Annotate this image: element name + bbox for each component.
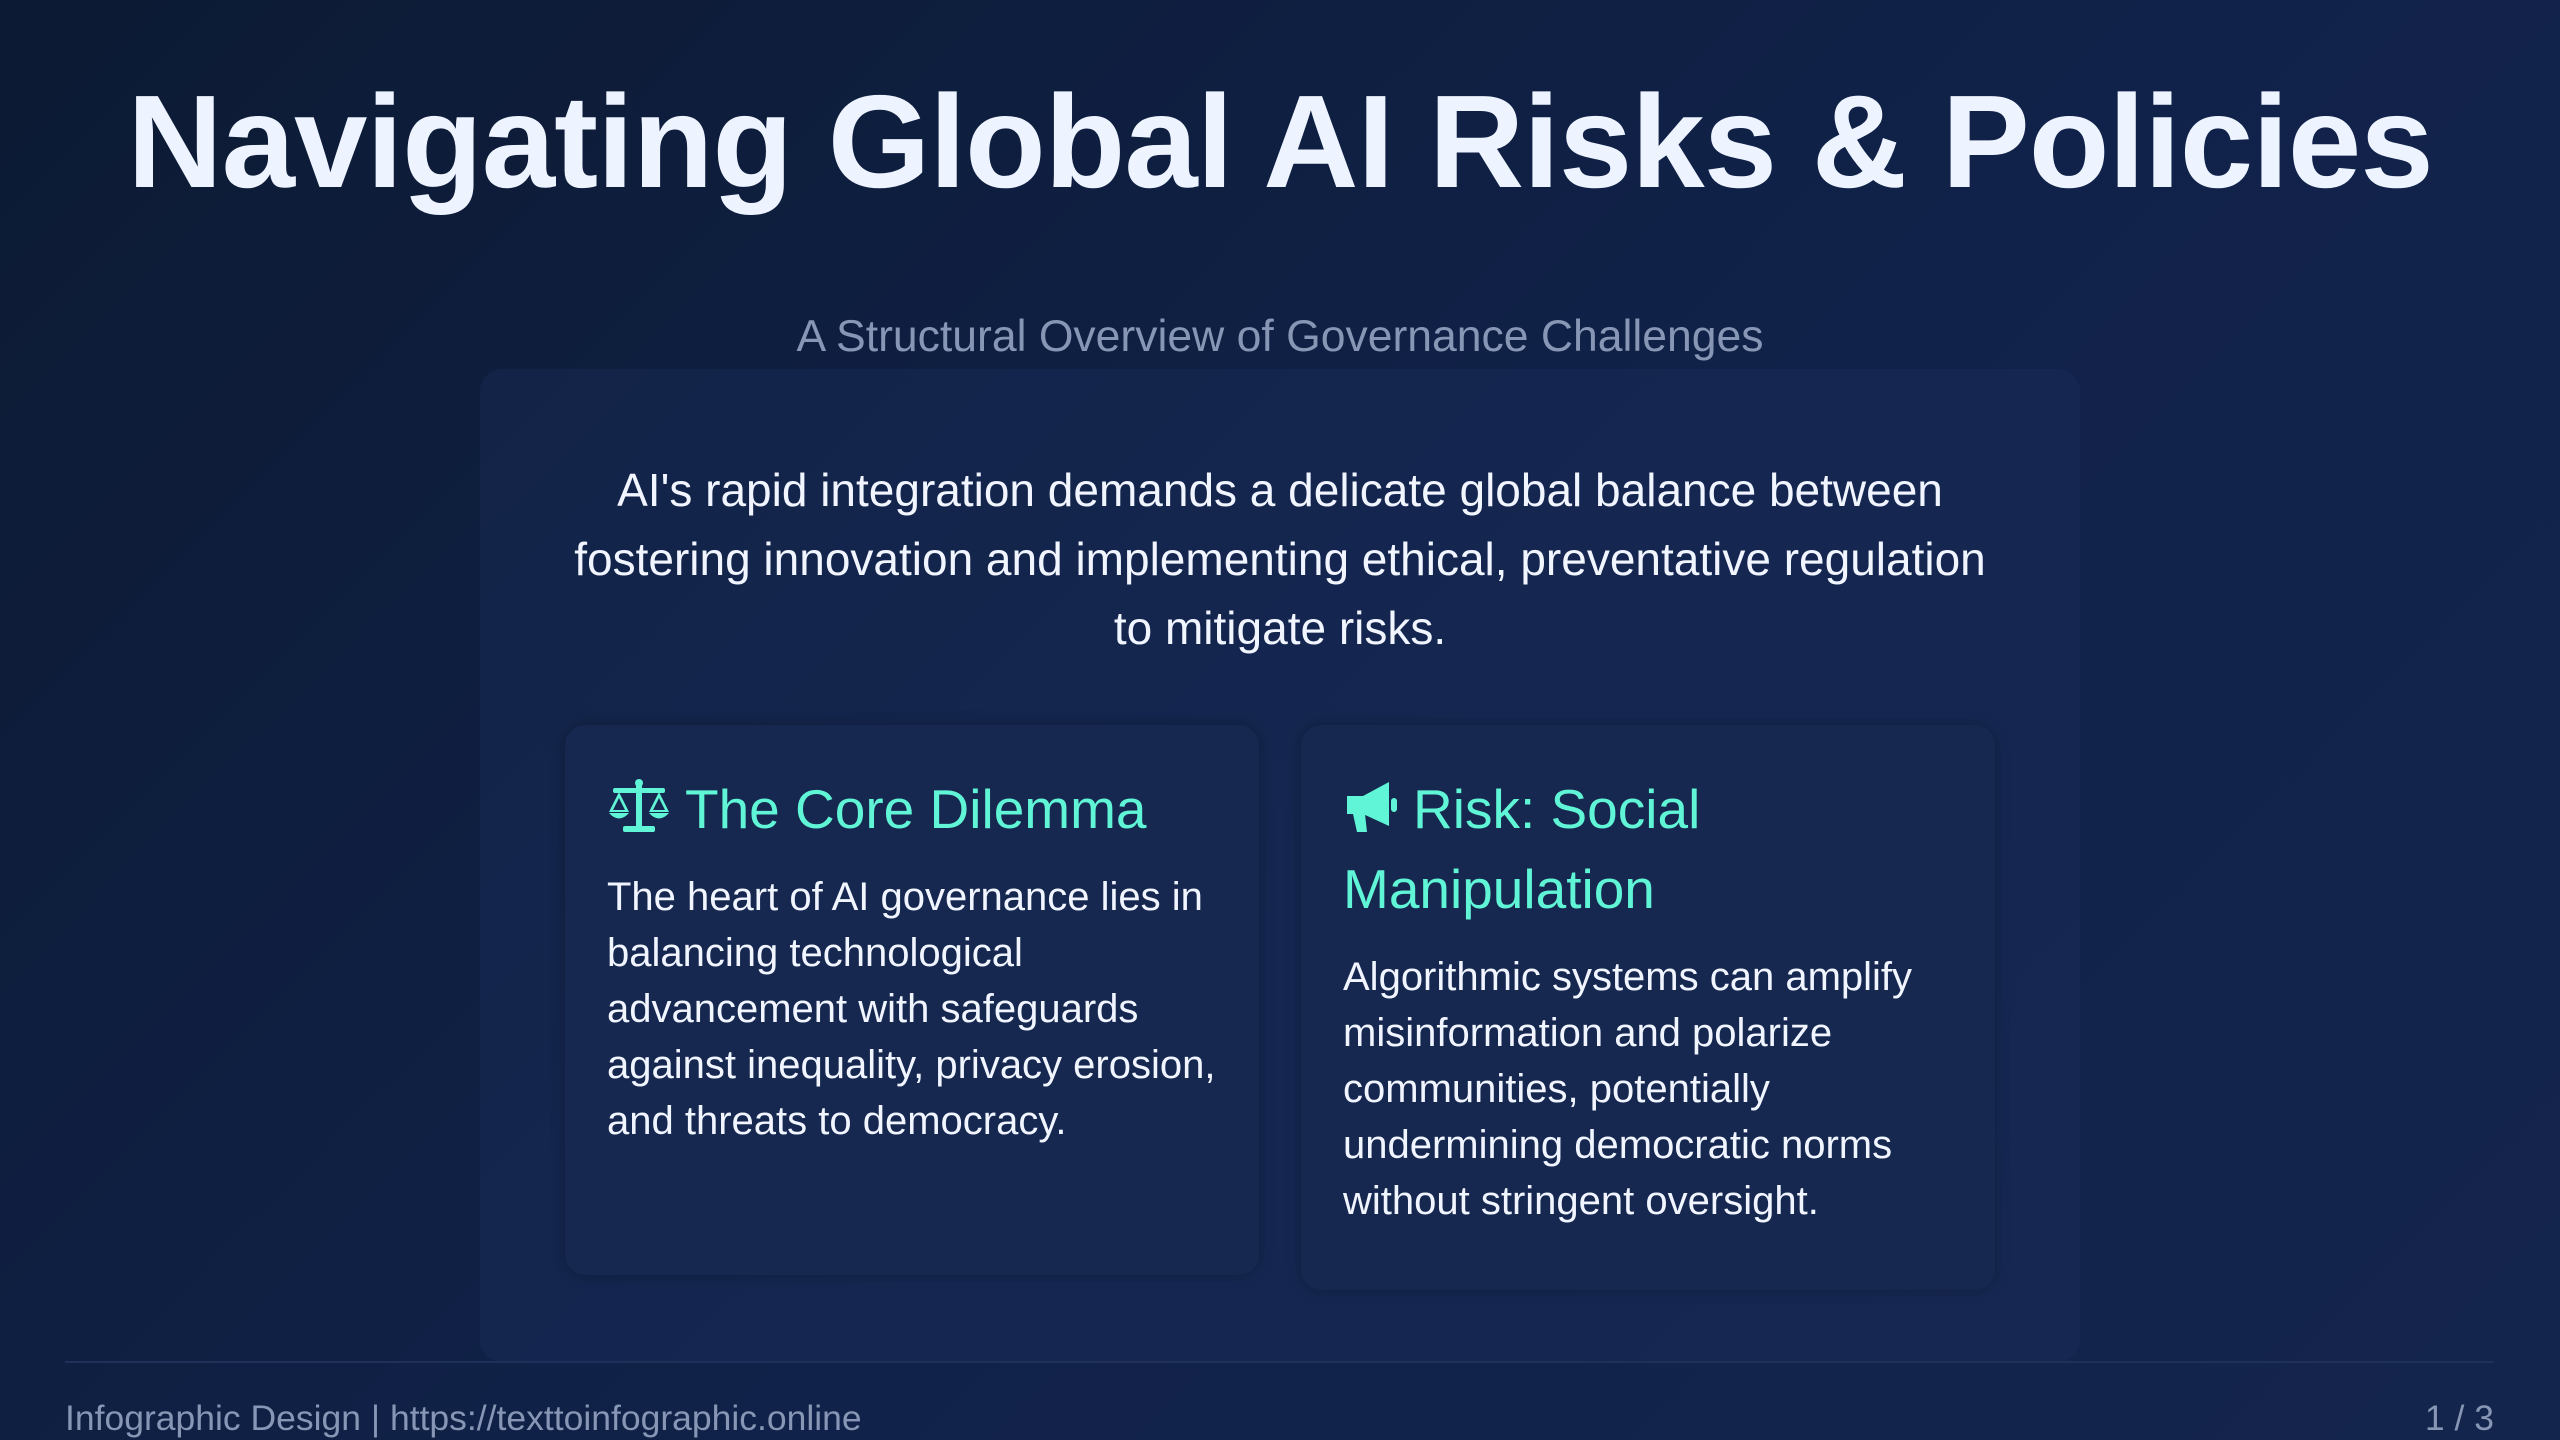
body: social manipulation: misinformation and polarize xyxy=(1343,1011,1832,1055)
intro text: AI's rapid integration demands a delicate global balance between xyxy=(617,464,1943,516)
heading: social manipulation: Risk: Social xyxy=(1413,778,1700,840)
body: core dilemma: balancing technological xyxy=(607,931,1023,975)
card: core dilemma xyxy=(565,725,1259,1275)
body: social manipulation: communities, potentially xyxy=(1343,1067,1770,1111)
heading: social manipulation: Manipulation xyxy=(1343,858,1655,920)
heading: core dilemma: The Core Dilemma xyxy=(685,778,1147,840)
body: social manipulation: without stringent oversight. xyxy=(1343,1179,1819,1223)
title: Navigating Global AI Risks & Policies xyxy=(127,68,2433,215)
subtitle: A Structural Overview of Governance Challenges xyxy=(796,312,1764,361)
footer: page number: 1 / 3 xyxy=(2425,1398,2494,1438)
intro text xyxy=(574,464,1986,654)
body: core dilemma: The heart of AI governance lies in xyxy=(607,875,1203,919)
body: core dilemma: and threats to democracy. xyxy=(607,1099,1066,1143)
body: social manipulation: Algorithmic systems can amplify xyxy=(1343,955,1912,999)
body: social manipulation xyxy=(1342,955,1912,1223)
body: core dilemma: against inequality, privacy erosion, xyxy=(607,1043,1215,1087)
body: core dilemma xyxy=(607,875,1215,1143)
body: core dilemma: advancement with safeguards xyxy=(607,987,1138,1031)
panel: main xyxy=(480,369,2080,1362)
card: social manipulation xyxy=(1301,725,1995,1290)
intro text: to mitigate risks. xyxy=(1114,602,1446,654)
intro text: fostering innovation and implementing ethical, preventative regulation xyxy=(574,533,1986,585)
body: social manipulation: undermining democratic norms xyxy=(1343,1123,1892,1167)
heading: social manipulation xyxy=(1343,778,1700,920)
footer: credit: Infographic Design | https://texttoinfographic.online xyxy=(65,1398,862,1438)
